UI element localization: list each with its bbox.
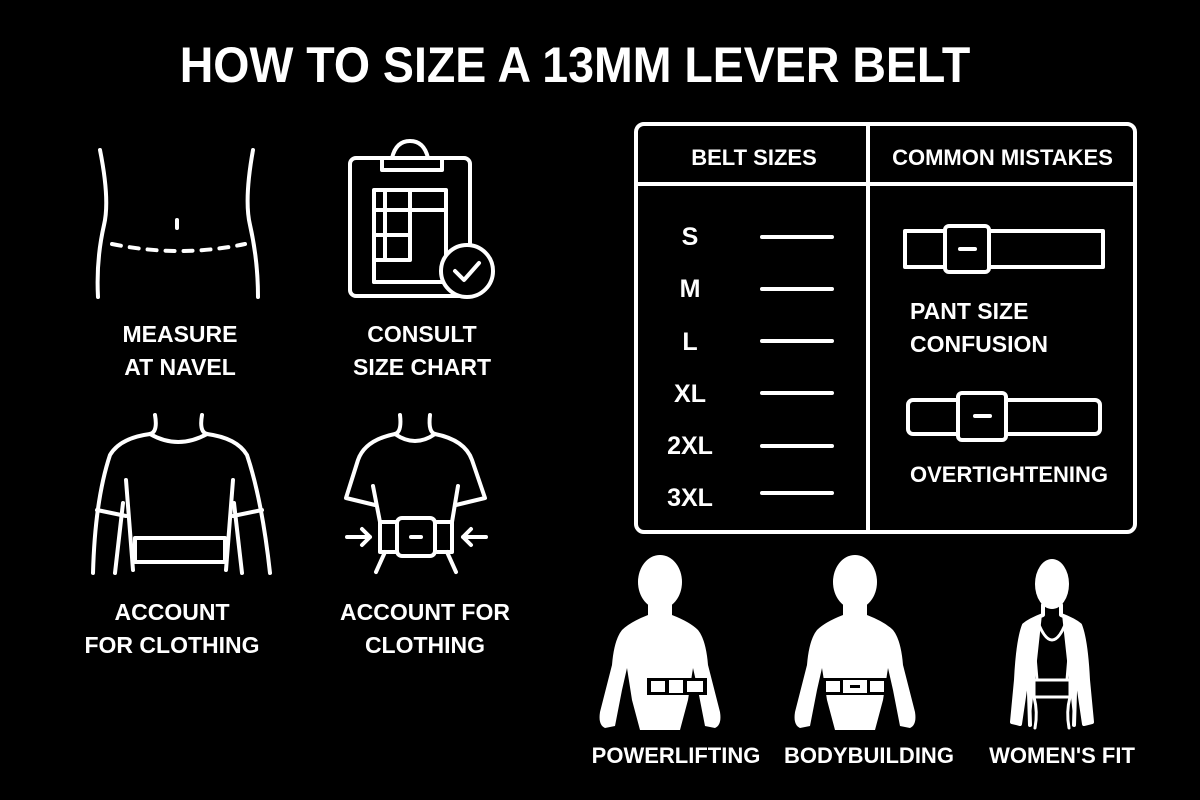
title: HOW TO SIZE A 13MM LEVER BELT: [180, 37, 970, 93]
label: measure at navel: [122, 321, 238, 380]
label: powerlifting: POWERLIFTING: [592, 743, 760, 768]
icon: belt overtightening: [908, 393, 1100, 440]
silhouette: women's fit: [1012, 559, 1092, 728]
label: pant size confusion: [910, 298, 1048, 357]
label: bodybuilding: BODYBUILDING: [784, 743, 954, 768]
icon: shirt with belt and arrows: [346, 415, 486, 572]
label: account for clothing 2: CLOTHING: [365, 632, 485, 658]
label: belt sizes header: BELT SIZES: [691, 145, 817, 170]
label: overtightening: OVERTIGHTENING: [910, 462, 1108, 487]
label: consult size chart: CONSULT: [367, 321, 477, 347]
label: consult size chart: [353, 321, 491, 380]
label: account for clothing 1: ACCOUNT: [114, 599, 230, 625]
size labels: 3XL: [667, 484, 713, 512]
label: pant size confusion: PANT SIZE: [910, 298, 1028, 324]
size labels: M: [680, 275, 700, 303]
icon: waist measure: [98, 150, 258, 297]
label: account for clothing 1: FOR CLOTHING: [84, 632, 260, 658]
label: measure at navel: AT NAVEL: [124, 354, 236, 380]
label: women's fit: WOMEN'S FIT: [989, 743, 1135, 768]
label: account for clothing 1: [84, 599, 260, 658]
label: account for clothing 2: [340, 599, 510, 658]
size labels: [667, 223, 713, 512]
label: consult size chart: SIZE CHART: [353, 354, 491, 380]
size table: [636, 124, 1135, 532]
label: measure at navel: MEASURE: [122, 321, 238, 347]
size labels: L: [682, 328, 698, 356]
icon: shirt with belt: [93, 415, 270, 573]
label: pant size confusion: CONFUSION: [910, 331, 1048, 357]
size labels: S: [682, 223, 698, 251]
icon: belt pant size: [905, 226, 1103, 272]
label: account for clothing 2: ACCOUNT FOR: [340, 599, 510, 625]
silhouette: powerlifting: [600, 555, 720, 730]
icon: clipboard: [350, 141, 493, 297]
size labels: 2XL: [667, 432, 713, 460]
label: common mistakes header: COMMON MISTAKES: [892, 145, 1113, 170]
silhouette: bodybuilding: [795, 555, 915, 730]
size labels: XL: [674, 380, 706, 408]
